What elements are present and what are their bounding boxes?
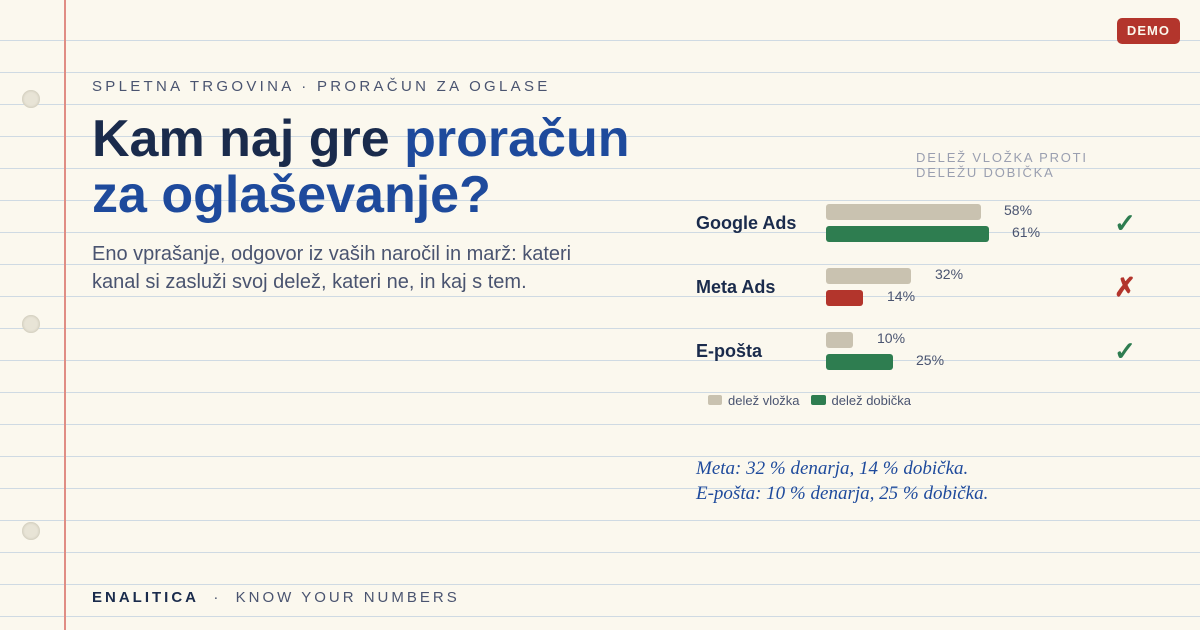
icon: punched hole bottom xyxy=(22,522,40,540)
chart heading: DELEŽU DOBIČKA xyxy=(916,165,1055,180)
bar: Google Ads spend xyxy=(826,204,980,220)
legend: delež dobička xyxy=(832,393,911,408)
legend xyxy=(708,393,911,408)
icon: cross: ✗ xyxy=(1114,273,1136,303)
row label: Google Ads: Google Ads xyxy=(696,213,796,233)
subtitle xyxy=(92,243,571,293)
footer: ENALITICA · KNOW YOUR NUMBERS xyxy=(92,589,460,606)
eyebrow: SPLETNA TRGOVINA · PRORAČUN ZA OGLASE xyxy=(92,78,551,95)
value: 58%: 58% xyxy=(1004,202,1032,218)
row label: Meta Ads: Meta Ads xyxy=(696,277,775,297)
icon: check: ✓ xyxy=(1114,209,1136,239)
italic takeaway xyxy=(696,458,988,504)
subtitle: kanal si zasluži svoj delež, kateri ne, in kaj s tem. xyxy=(92,271,527,293)
icon: punched hole middle xyxy=(22,315,40,333)
bar: E-pošta profit xyxy=(826,354,892,370)
icon: punched hole top xyxy=(22,90,40,108)
demo badge: DEMO xyxy=(1127,23,1170,38)
value: 25%: 25% xyxy=(916,352,944,368)
bar: Meta Ads profit xyxy=(826,290,863,306)
title: Kam naj gre proračun xyxy=(92,110,629,168)
title: za oglaševanje? xyxy=(92,166,491,224)
subtitle: Eno vprašanje, odgovor iz vaših naročil in marž: kateri xyxy=(92,243,571,265)
chart heading xyxy=(916,150,1088,180)
value: 14%: 14% xyxy=(887,288,915,304)
bar: E-pošta spend xyxy=(826,332,852,348)
value: 32%: 32% xyxy=(935,266,963,282)
legend: delež vložka xyxy=(728,393,800,408)
italic takeaway: Meta: 32 % denarja, 14 % dobička. xyxy=(696,458,968,479)
row label: E-pošta: E-pošta xyxy=(696,341,762,361)
bar: Meta Ads spend xyxy=(826,268,911,284)
demo badge xyxy=(1117,18,1180,44)
italic takeaway: E-pošta: 10 % denarja, 25 % dobička. xyxy=(696,483,988,504)
value: 10%: 10% xyxy=(877,330,905,346)
title xyxy=(92,110,629,224)
value: 61%: 61% xyxy=(1012,224,1040,240)
icon: check: ✓ xyxy=(1114,337,1136,367)
bar: Google Ads profit xyxy=(826,226,988,242)
chart heading: DELEŽ VLOŽKA PROTI xyxy=(916,150,1088,165)
